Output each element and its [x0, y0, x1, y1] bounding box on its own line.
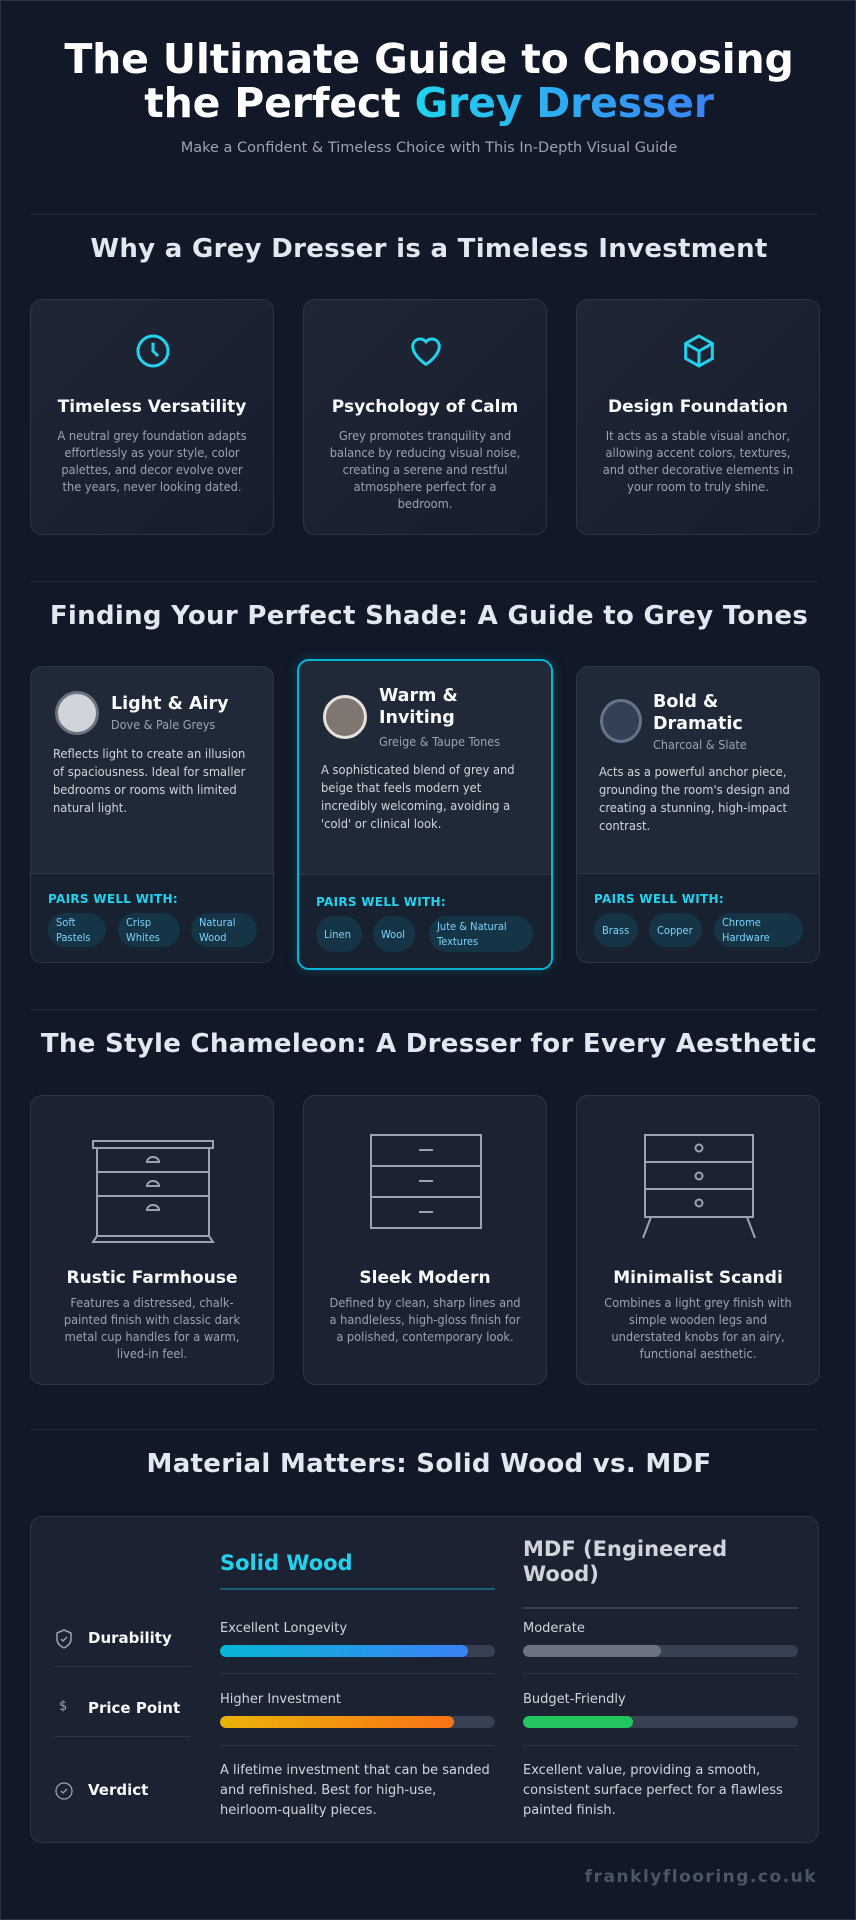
text: desc: Reflects light to create an illusion of spaciousness. Ideal for smaller bedrooms or rooms with limited natural light. [53, 747, 245, 816]
panel: comparison: Moderate [523, 1621, 585, 1636]
panel: light & airy [30, 666, 274, 963]
pairs: PAIRS WELL WITH: [594, 892, 724, 906]
panel: comparison: Budget-Friendly [523, 1692, 626, 1707]
row label: price point: Price Point [88, 1699, 180, 1717]
heading: material: Material Matters: Solid Wood vs. MDF [147, 1449, 711, 1479]
pairs [299, 874, 551, 968]
footer: franklyflooring.co.uk [585, 1867, 817, 1887]
text: title: Dramatic [653, 714, 743, 734]
pairs: Wool [381, 928, 405, 940]
pairs: PAIRS WELL WITH: [316, 895, 446, 909]
text: desc: Grey promotes tranquility and balance by reducing visual noise, creating a serene and restful atmosphere perfect for a bedroom. [330, 428, 520, 511]
text: title: Warm & [379, 686, 458, 706]
pairs: Chrome Hardware [722, 916, 770, 944]
panel: light & airy: Dove & Pale Greys [111, 717, 215, 732]
text: desc: A neutral grey foundation adapts effortlessly as your style, color palettes, and decor evolve over the years, never looking dated. [57, 428, 247, 494]
text: desc: Features a distressed, chalk-painted finish with classic dark metal cup handles for a warm, lived-in feel. [64, 1295, 240, 1361]
text: title [379, 686, 458, 728]
text: title: Rustic Farmhouse [66, 1268, 237, 1288]
row label: price point [55, 1697, 191, 1737]
text: desc: It acts as a stable visual anchor, allowing accent colors, textures, and other decorative elements in your room to truly shine. [603, 428, 793, 494]
column header: solid wood [220, 1551, 495, 1590]
column header: mdf [523, 1537, 798, 1609]
title: The Ultimate Guide to Choosing [64, 35, 794, 83]
panel: bold & dramatic: Charcoal & Slate [653, 737, 747, 752]
panel: minimalist scandi [576, 1095, 820, 1385]
icon: heart [411, 338, 441, 366]
title [64, 35, 794, 127]
panel: warm & inviting [297, 659, 553, 970]
panel: sleek modern [303, 1095, 547, 1385]
panel: psychology of calm [303, 299, 547, 535]
text: title: Inviting [379, 708, 455, 728]
text: title: Light & Airy [111, 694, 229, 714]
row label: durability: Durability [88, 1629, 172, 1647]
pairs: Brass [602, 924, 629, 936]
text: title: Sleek Modern [359, 1268, 491, 1288]
swatch [55, 691, 99, 735]
row label: verdict: Verdict [88, 1781, 148, 1799]
text: desc: Acts as a powerful anchor piece, grounding the room's design and creating a stunning, high-impact contrast. [599, 765, 790, 834]
text: desc: Combines a light grey finish with simple wooden legs and understated knobs for an airy, functional aesthetic. [604, 1295, 792, 1361]
panel: design foundation [576, 299, 820, 535]
icon: modern dresser [370, 1134, 482, 1229]
pairs: Jute & Natural Textures [437, 920, 507, 948]
verdict values: A lifetime investment that can be sanded and refinished. Best for high-use, heirloom-quality pieces. [220, 1763, 490, 1818]
heading: why: Why a Grey Dresser is a Timeless Investment [90, 234, 768, 264]
text: title: Minimalist Scandi [613, 1268, 783, 1288]
icon: scandi dresser [642, 1134, 756, 1238]
text: title: Psychology of Calm [332, 397, 518, 417]
price values: Higher Investment [220, 1692, 341, 1707]
pairs: Copper [657, 924, 693, 936]
icon: clock [136, 334, 170, 368]
text: desc: A sophisticated blend of grey and beige that feels modern yet incredibly welcoming, avoiding a 'cold' or clinical look. [321, 763, 515, 832]
pairs: Natural Wood [199, 916, 236, 944]
icon: cube [684, 334, 714, 368]
heading: shades: Finding Your Perfect Shade: A Guide to Grey Tones [50, 601, 808, 631]
row label: price point: $ [59, 1699, 67, 1714]
column header: mdf: MDF (Engineered Wood) [523, 1537, 727, 1586]
text: title [653, 692, 743, 734]
swatch [323, 695, 367, 739]
panel: warm & inviting: Greige & Taupe Tones [379, 734, 500, 749]
pairs: Crisp Whites [126, 916, 160, 944]
text: title: Design Foundation [608, 397, 788, 417]
panel: rustic farmhouse [30, 1095, 274, 1385]
column header: solid wood: Solid Wood [220, 1551, 353, 1575]
pairs [31, 873, 273, 962]
row label: verdict [55, 1781, 148, 1800]
text: desc: Defined by clean, sharp lines and a handleless, high-gloss finish for a polished, contemporary look. [329, 1295, 521, 1344]
heading: styles: The Style Chameleon: A Dresser for Every Aesthetic [41, 1029, 817, 1059]
text: title: Bold & [653, 692, 718, 712]
pairs: Soft Pastels [56, 916, 91, 944]
panel: comparison: Excellent value, providing a smooth, consistent surface perfect for a flawless painted finish. [523, 1763, 783, 1818]
panel: bold & dramatic [576, 666, 820, 963]
durability values: Excellent Longevity [220, 1621, 347, 1636]
pairs [577, 873, 819, 962]
panel: timeless versatility [30, 299, 274, 535]
text: title: Timeless Versatility [58, 397, 246, 417]
title: the Perfect Grey Dresser [144, 79, 714, 127]
icon: rustic dresser [91, 1140, 215, 1243]
pairs: Linen [324, 928, 351, 940]
subtitle: Make a Confident & Timeless Choice with This In-Depth Visual Guide [181, 140, 677, 156]
row label: durability [55, 1625, 191, 1667]
swatch [600, 699, 642, 743]
panel: comparison [30, 1516, 819, 1843]
pairs: PAIRS WELL WITH: [48, 892, 178, 906]
